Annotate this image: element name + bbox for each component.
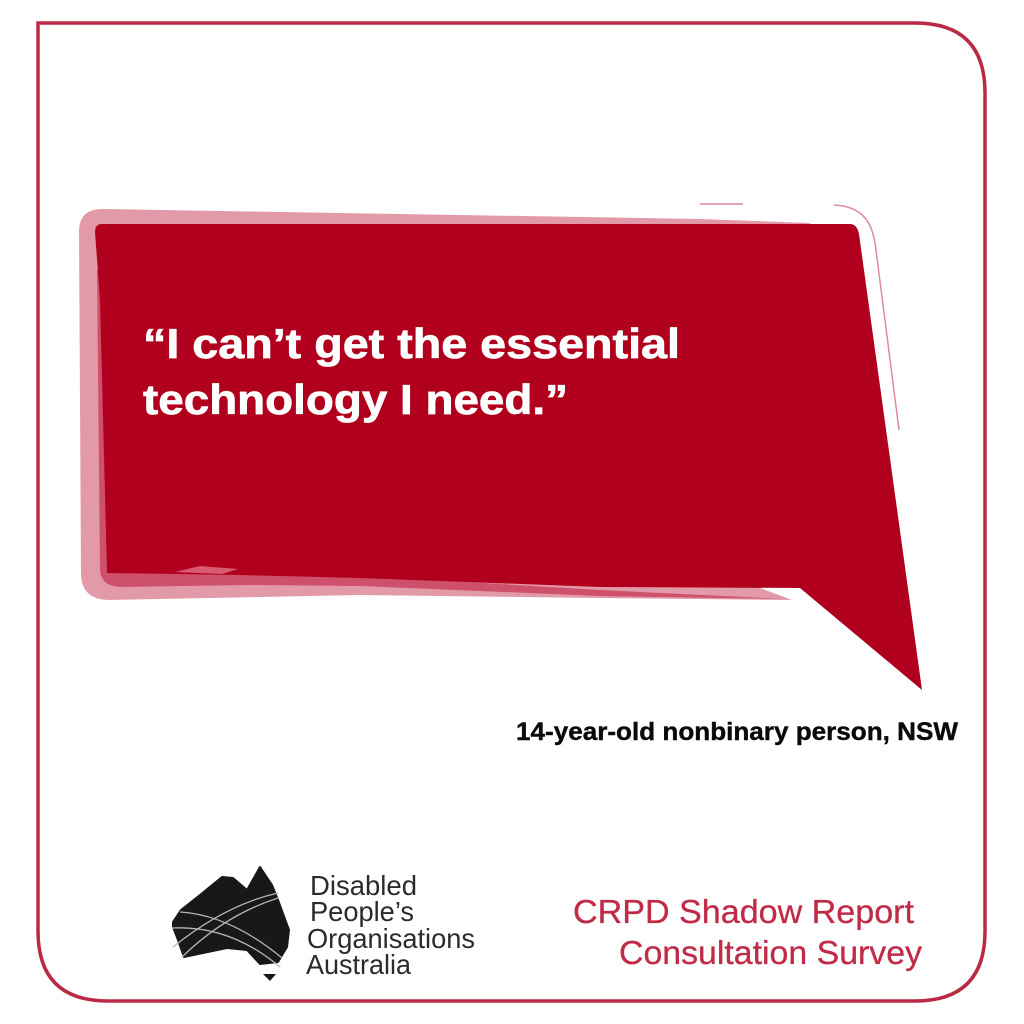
bubble bottom brush streak [175, 566, 238, 574]
quote text [143, 320, 680, 423]
bubble inner brush shade [97, 270, 782, 599]
quote line 1: “I can’t get the essential [143, 320, 680, 367]
quote line 2: technology I need.” [143, 376, 568, 423]
bubble brush halo [79, 209, 810, 600]
bubble thin right brush stroke [834, 205, 899, 430]
speech bubble [79, 204, 922, 690]
logo: Disabled People's Organisations Australia [172, 867, 475, 981]
bubble main shape [95, 224, 922, 690]
survey title line 2: Consultation Survey [619, 934, 923, 971]
attribution caption: 14-year-old nonbinary person, NSW [516, 718, 958, 746]
survey title line 1: CRPD Shadow Report [573, 893, 914, 930]
survey title [573, 893, 923, 971]
wordmark line 1: Disabled [310, 870, 417, 901]
bubble thin top brush stroke [700, 203, 743, 205]
wordmark line 3: Organisations [307, 923, 475, 954]
wordmark line 4: Australia [306, 949, 411, 980]
icon: Australia map [172, 867, 289, 981]
wordmark line 2: People’s [310, 896, 414, 927]
logo wordmark [306, 870, 475, 980]
